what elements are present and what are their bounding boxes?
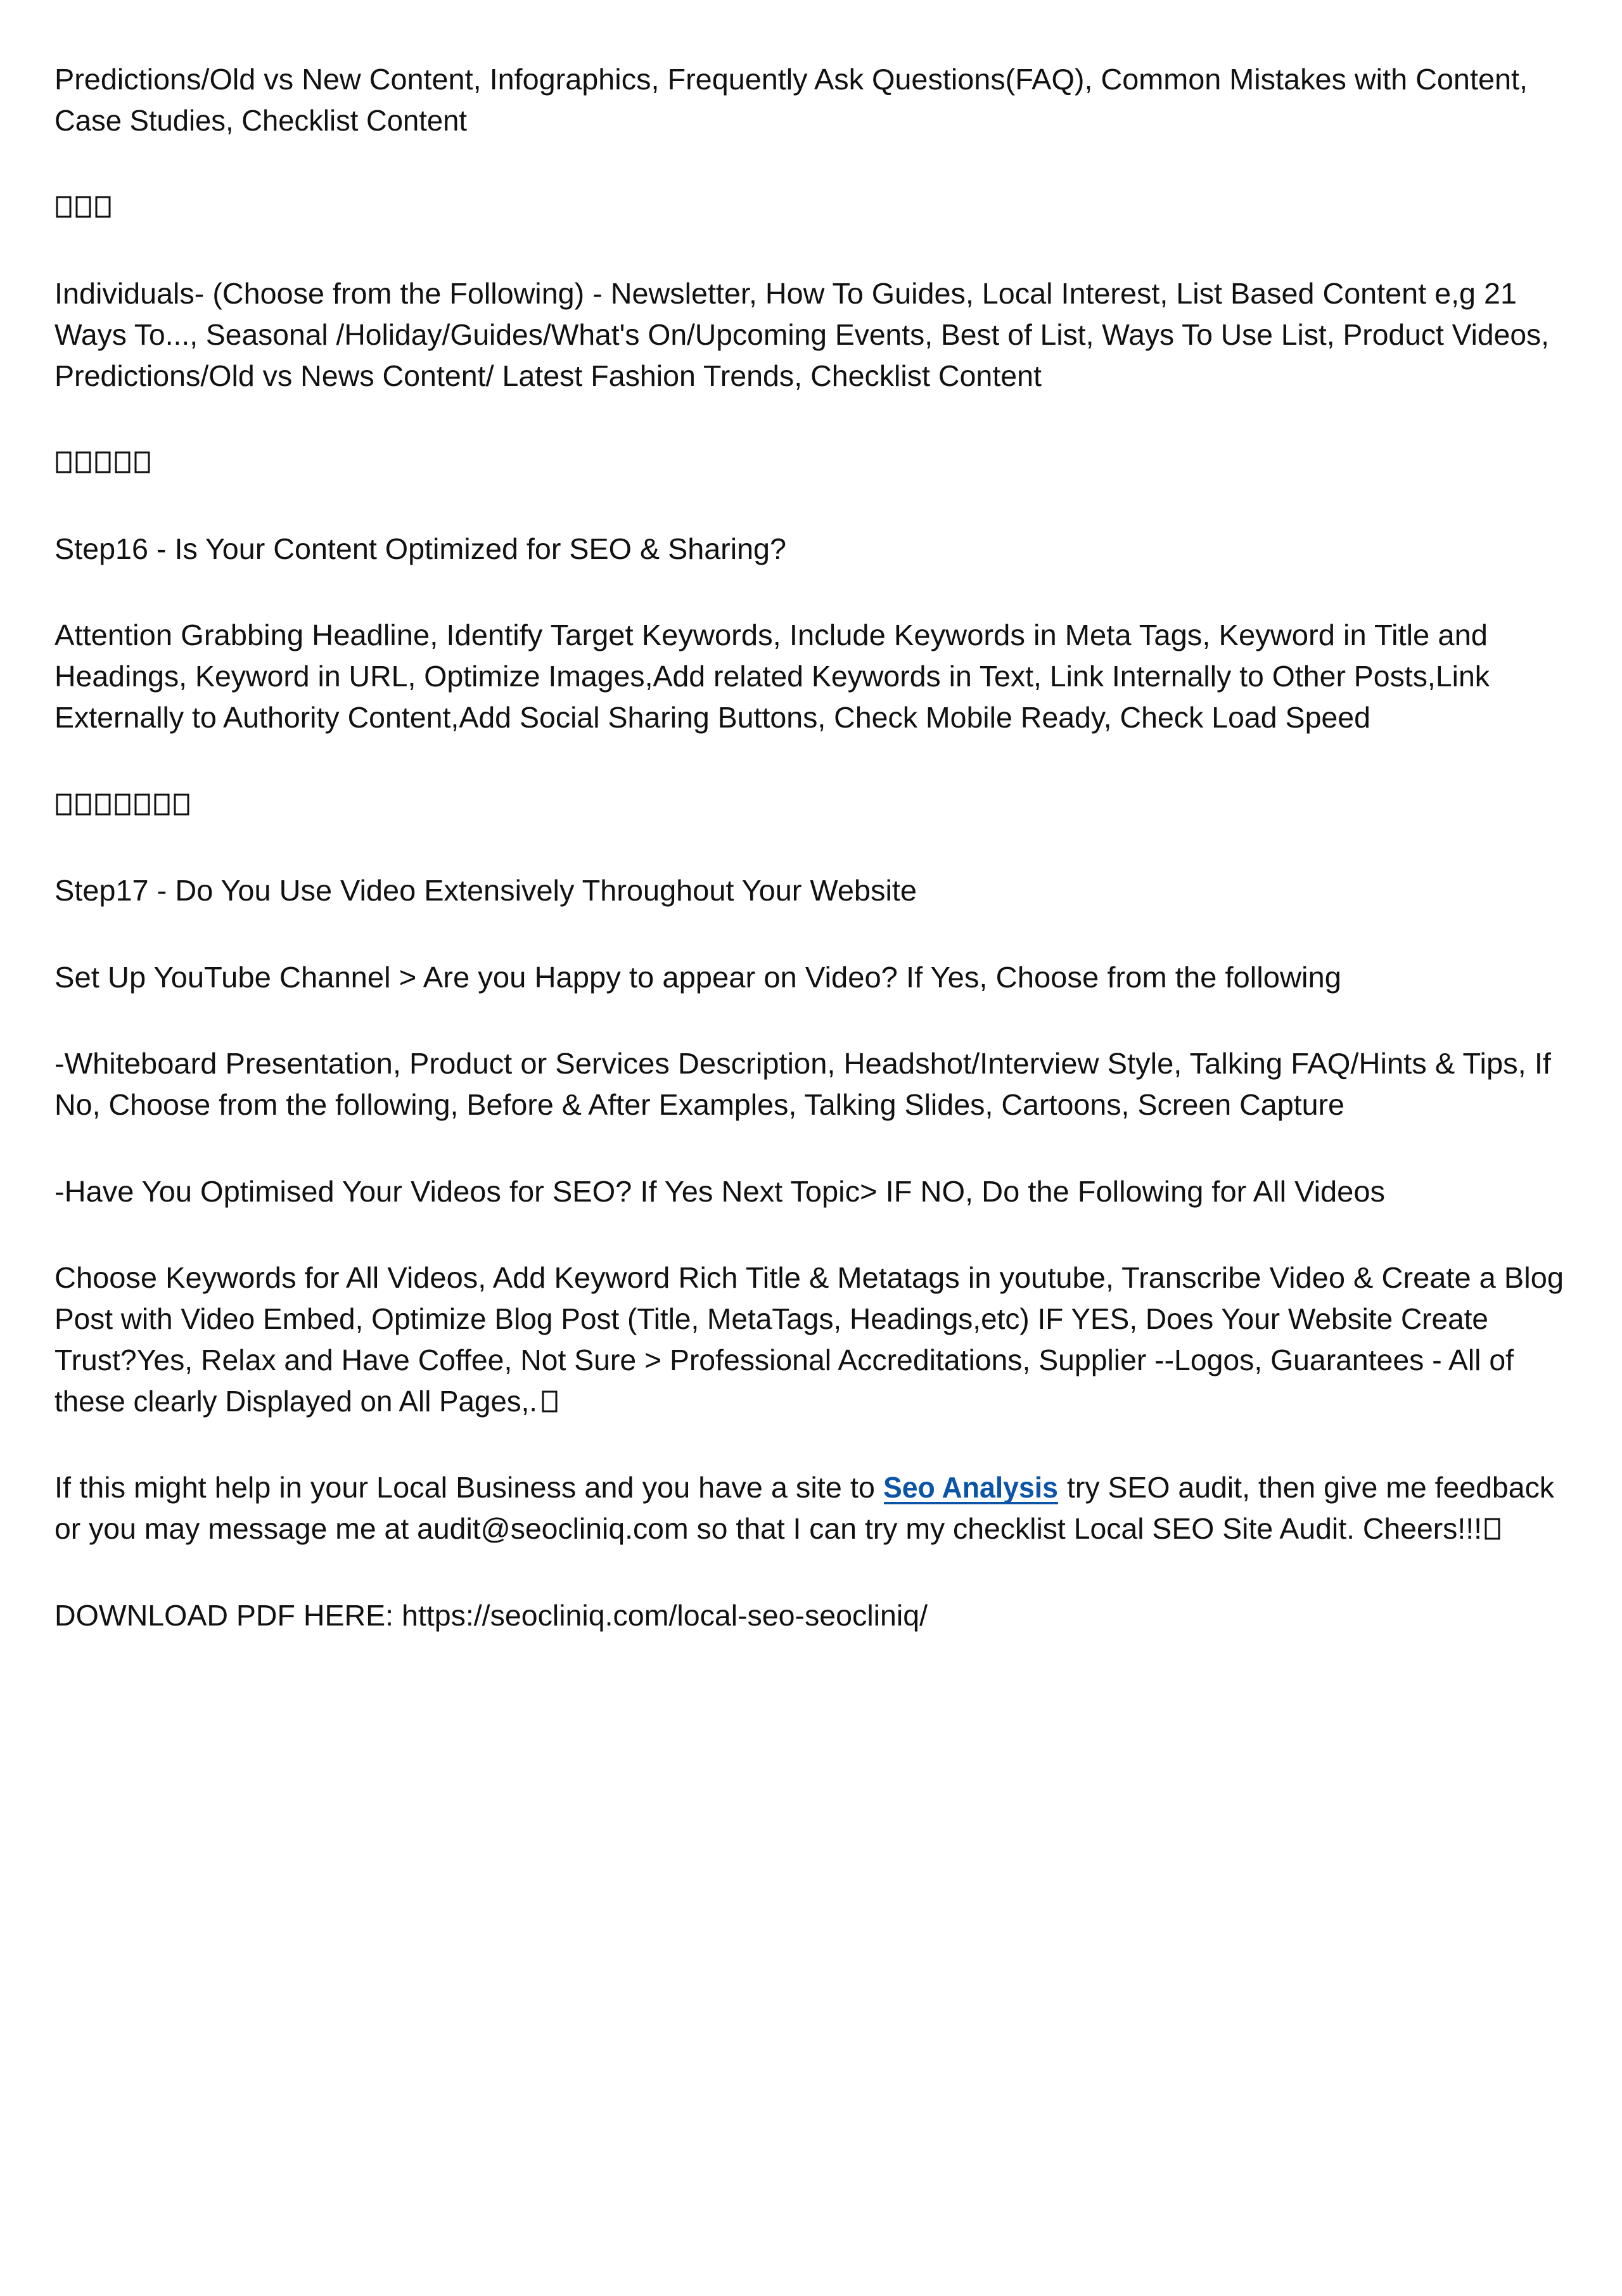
text block: video keyword steps: Trust?Yes, Relax and Have Coffee, Not Sure > Professional Accreditations, Supplier --Logos, Guarantees - All of: [54, 1344, 1514, 1376]
text block: content types continued: [54, 63, 1528, 137]
icon: five missing-glyph boxes: [57, 452, 149, 472]
heading: step 16: Step16 - Is Your Content Optimized for SEO & Sharing?: [54, 532, 786, 565]
text block: individuals content list: Predictions/Old vs News Content/ Latest Fashion Trends, Checklist Content: [54, 359, 1042, 392]
text block: youtube channel: Set Up YouTube Channel > Are you Happy to appear on Video? If Yes, Choose from the following: [54, 961, 1341, 994]
text block: content types continued: Case Studies, Checklist Content: [54, 104, 467, 137]
text block: video styles: -Whiteboard Presentation, Product or Services Description, Headshot/Interview Style, Talking FAQ/Hints & Tips, If: [54, 1047, 1551, 1080]
link: Seo Analysis: Seo Analysis: [883, 1471, 1058, 1504]
text block: video styles: [54, 1047, 1551, 1121]
text block: individuals content list: [54, 277, 1549, 392]
text block: video keyword steps: Post with Video Embed, Optimize Blog Post (Title, MetaTags, Headings,etc) IF YES, Does Your Website Create: [54, 1302, 1488, 1335]
icon: seven missing-glyph boxes: [57, 795, 188, 814]
text block: step 16 checklist: Headings, Keyword in URL, Optimize Images,Add related Keywords in Text, Link Internally to Other Posts,Link: [54, 660, 1490, 693]
text block: video keyword steps: Choose Keywords for All Videos, Add Keyword Rich Title & Metatags in youtube, Transcribe Video & Create a Blog: [54, 1261, 1564, 1294]
icon: three missing-glyph boxes: [57, 197, 110, 217]
text block: individuals content list: Individuals- (Choose from the Following) - Newsletter, How To Guides, Local Interest, List Based Content e,g 21: [54, 277, 1517, 310]
text block: video keyword steps: these clearly Displayed on All Pages,.: [54, 1385, 537, 1418]
heading: step 17: Step17 - Do You Use Video Extensively Throughout Your Website: [54, 874, 917, 907]
text block: step 16 checklist: Attention Grabbing Headline, Identify Target Keywords, Include Keywords in Meta Tags, Keyword in Title and: [54, 619, 1488, 651]
text block: content types continued: Predictions/Old vs New Content, Infographics, Frequently Ask Questions(FAQ), Common Mistakes with Content,: [54, 63, 1528, 96]
text block: video keyword steps: [54, 1261, 1564, 1418]
text block: call to action with link: [54, 1471, 1555, 1545]
text block: call to action with link: If this might help in your Local Business and you have a site to: [54, 1471, 875, 1504]
text block: step 16 checklist: Externally to Authority Content,Add Social Sharing Buttons, Check Mobile Ready, Check Load Speed: [54, 701, 1370, 734]
text block: individuals content list: Ways To..., Seasonal /Holiday/Guides/What's On/Upcoming Events, Best of List, Ways To Use List, Product Videos,: [54, 318, 1549, 351]
text block: video SEO question: -Have You Optimised Your Videos for SEO? If Yes Next Topic> IF NO, Do the Following for All Videos: [54, 1175, 1385, 1208]
text block: video styles: No, Choose from the following, Before & After Examples, Talking Slides, Cartoons, Screen Capture: [54, 1088, 1344, 1121]
text block: call to action with link: or you may message me at audit@seocliniq.com so that I can try my checklist Local SEO Site Audit. Cheers!!!: [54, 1512, 1482, 1545]
text block: download link: DOWNLOAD PDF HERE: https://seocliniq.com/local-seo-seocliniq/: [54, 1599, 928, 1632]
text block: call to action with link: try SEO audit, then give me feedback: [1067, 1471, 1555, 1504]
text block: step 16 checklist: [54, 619, 1490, 734]
